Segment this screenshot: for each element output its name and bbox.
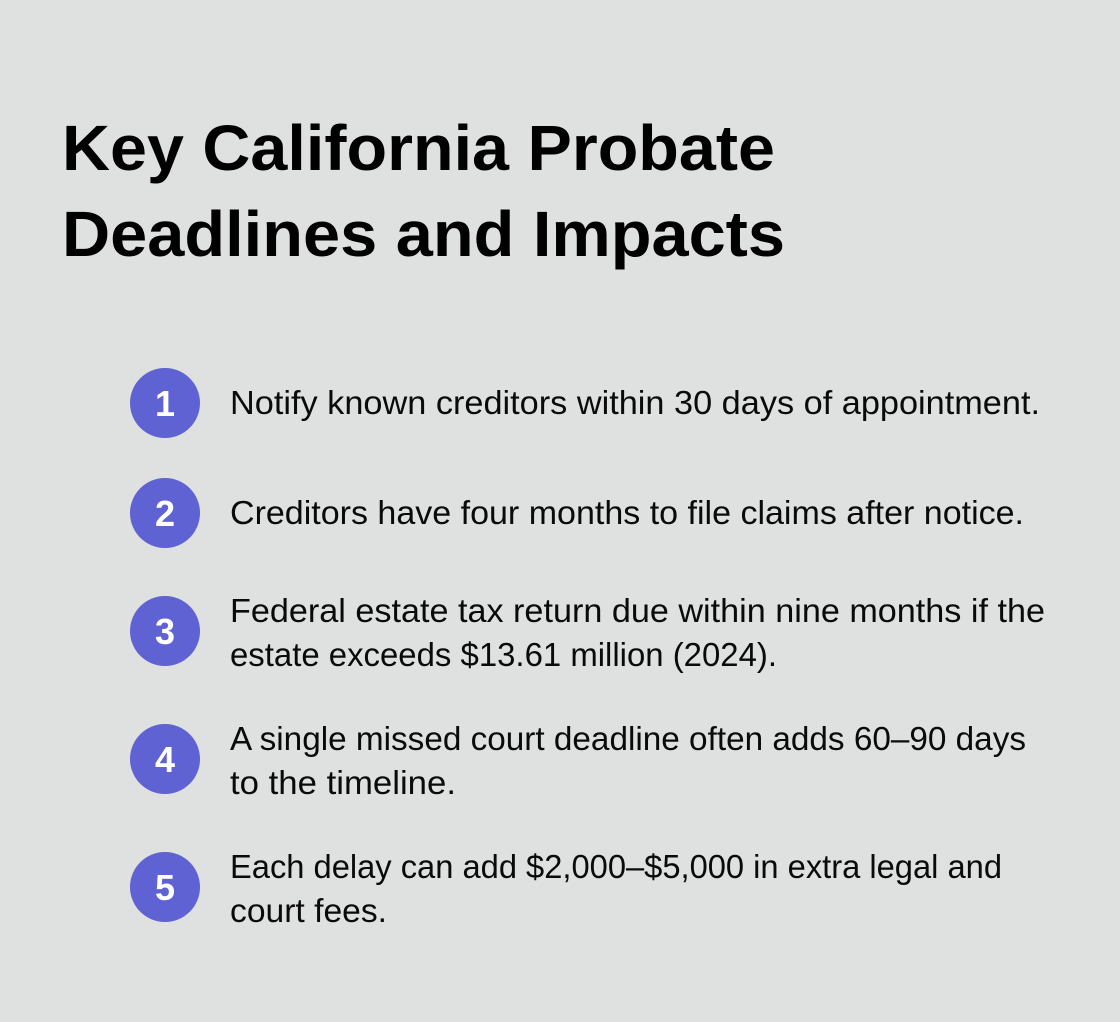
number badge 5 — [130, 852, 200, 922]
item 3 text: estate exceeds $13.61 million (2024). — [230, 636, 777, 673]
item 5 text — [230, 848, 1002, 929]
title — [62, 112, 785, 270]
item 1 text: Notify known creditors within 30 days of appointment. — [230, 384, 1040, 421]
number badge 3: 3 — [155, 611, 175, 652]
number badge 1: 1 — [155, 383, 175, 424]
number badge 2 — [130, 478, 200, 548]
title: Deadlines and Impacts — [62, 198, 785, 270]
number badge 4: 4 — [155, 739, 175, 780]
list item 1 — [130, 368, 1040, 438]
number badge 4 — [130, 724, 200, 794]
item 3 text: Federal estate tax return due within nine months if the — [230, 592, 1045, 629]
item 5 text: court fees. — [230, 892, 387, 929]
list item 5 — [130, 848, 1002, 929]
item 3 text — [230, 592, 1045, 673]
list item 4 — [130, 720, 1026, 801]
item 4 text: to the timeline. — [230, 764, 456, 801]
list item 3 — [130, 592, 1045, 673]
item 4 text: A single missed court deadline often adds 60–90 days — [230, 720, 1026, 757]
number badge 3 — [130, 596, 200, 666]
number badge 2: 2 — [155, 493, 175, 534]
item 5 text: Each delay can add $2,000–$5,000 in extra legal and — [230, 848, 1002, 885]
list item 2 — [130, 478, 1024, 548]
item 2 text: Creditors have four months to file claims after notice. — [230, 494, 1024, 531]
number badge 5: 5 — [155, 867, 175, 908]
item 4 text — [230, 720, 1026, 801]
title: Key California Probate — [62, 112, 775, 184]
number badge 1 — [130, 368, 200, 438]
